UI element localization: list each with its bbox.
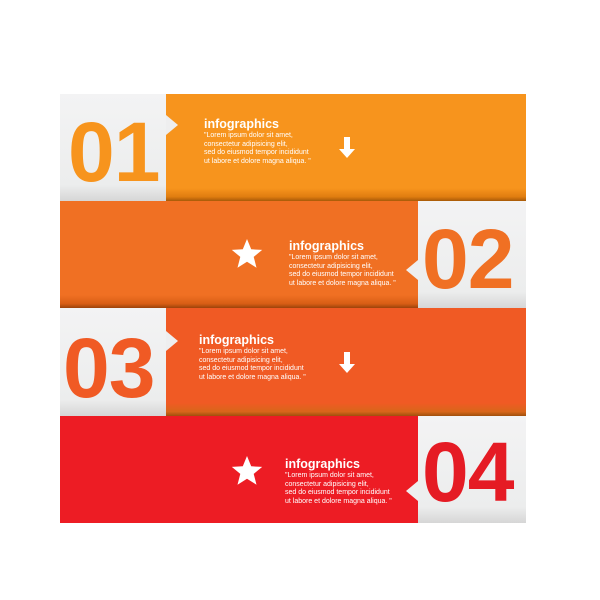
row 4 panel (60, 416, 526, 523)
text block 4: consectetur adipisicing elit, (285, 481, 369, 488)
row 1 panel (60, 94, 526, 201)
icon: arrow down (339, 137, 355, 158)
number box 03: 03 (63, 321, 154, 415)
text block 2: infographics (289, 239, 364, 253)
row 3 panel (60, 308, 526, 416)
text block 1: sed do eiusmod tempor incididunt (204, 149, 309, 156)
text block 4 (285, 457, 392, 505)
text block 2: sed do eiusmod tempor incididunt (289, 271, 394, 278)
red band 4 (60, 416, 418, 523)
text block 4: sed do eiusmod tempor incididunt (285, 489, 390, 496)
icon: star (232, 239, 262, 268)
pointer (406, 481, 418, 501)
icon: star (232, 456, 262, 485)
number box 02: 02 (422, 212, 513, 306)
pointer (406, 260, 418, 280)
text block 3: infographics (199, 333, 274, 347)
text block 1: ut labore et dolore magna aliqua. " (204, 158, 311, 165)
text block 4: "Lorem ipsum dolor sit amet, (285, 472, 374, 479)
text block 4: infographics (285, 457, 360, 471)
text block 3: "Lorem ipsum dolor sit amet, (199, 348, 288, 355)
text block 3 (199, 333, 306, 381)
orange band 3 (166, 308, 526, 416)
icon: arrow down (339, 352, 355, 373)
orange band 2 (60, 201, 418, 308)
number box 01: 01 (68, 105, 159, 199)
text block 1 (204, 117, 311, 165)
text block 1: "Lorem ipsum dolor sit amet, (204, 132, 293, 139)
pointer (166, 115, 178, 135)
text block 4: ut labore et dolore magna aliqua. " (285, 498, 392, 505)
text block 3: consectetur adipisicing elit, (199, 357, 283, 364)
text block 3: ut labore et dolore magna aliqua. " (199, 374, 306, 381)
text block 2: "Lorem ipsum dolor sit amet, (289, 254, 378, 261)
pointer (166, 331, 178, 351)
number box 04: 04 (422, 425, 513, 519)
text block 1: infographics (204, 117, 279, 131)
row 2 panel (60, 201, 526, 308)
text block 2 (289, 239, 396, 287)
text block 1: consectetur adipisicing elit, (204, 141, 288, 148)
orange band 1 (166, 94, 526, 201)
text block 2: ut labore et dolore magna aliqua. " (289, 280, 396, 287)
text block 2: consectetur adipisicing elit, (289, 263, 373, 270)
text block 3: sed do eiusmod tempor incididunt (199, 365, 304, 372)
